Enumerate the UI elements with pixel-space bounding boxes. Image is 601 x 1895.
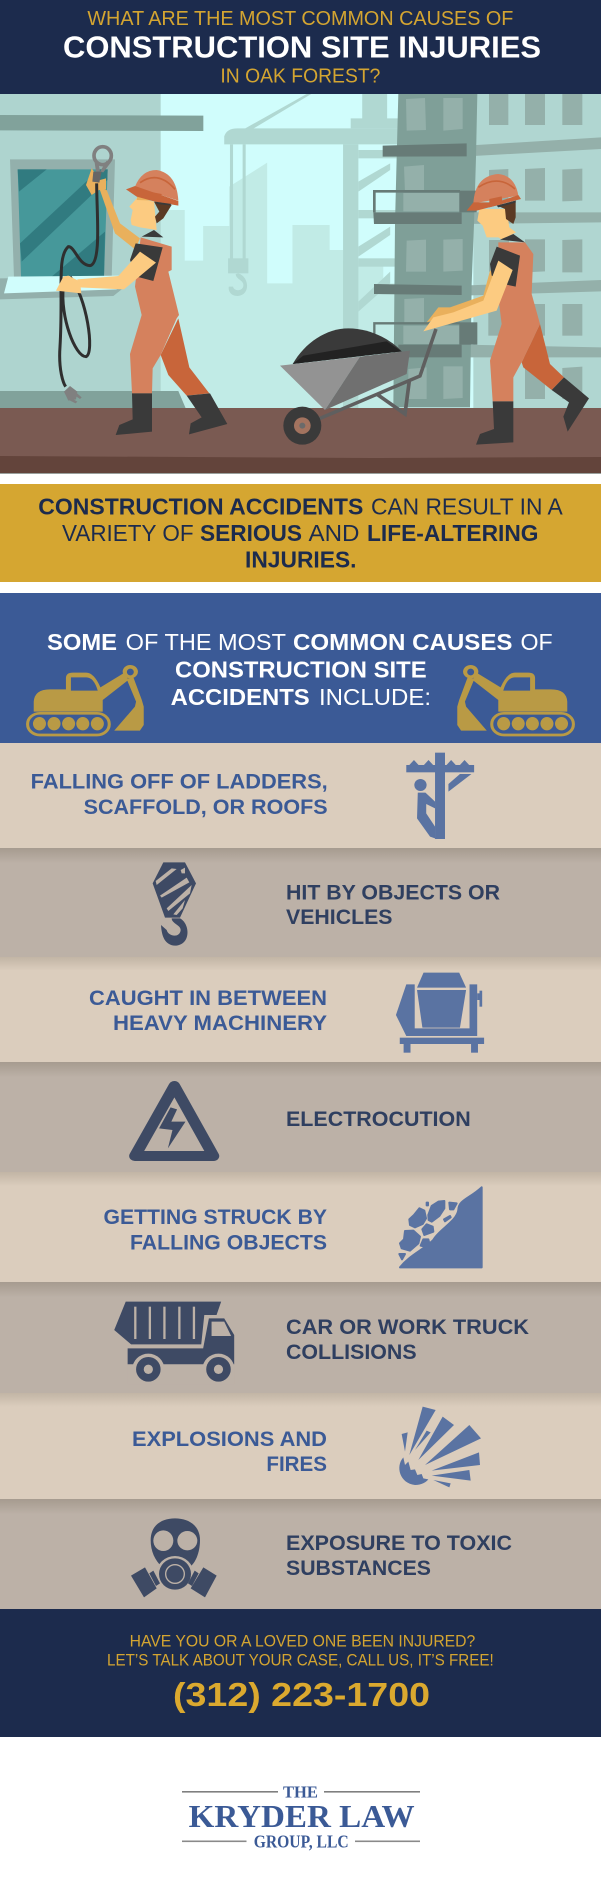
logo: The Kryder Law Group: GROUP, LLC bbox=[254, 1832, 349, 1852]
icon: excavator left bbox=[28, 665, 144, 735]
panel: explosions and fires: FIRES bbox=[266, 1452, 327, 1476]
panel: truck collisions: CAR OR WORK TRUCK bbox=[286, 1315, 529, 1339]
panel: falling objects: FALLING OBJECTS bbox=[130, 1230, 327, 1254]
panel: toxic substances: EXPOSURE TO TOXIC bbox=[286, 1531, 512, 1555]
title line two: CONSTRUCTION SITE INJURIES bbox=[63, 31, 541, 65]
panel: hit by objects bbox=[0, 848, 601, 957]
callout: gold intro band: CAN RESULT IN A bbox=[371, 494, 563, 520]
heading text: OF bbox=[520, 629, 553, 655]
heading text: SOME bbox=[47, 629, 117, 655]
callout: gold intro band: SERIOUS bbox=[200, 520, 302, 546]
icon: cement mixer bbox=[396, 973, 484, 1053]
heading text: CONSTRUCTION SITE bbox=[175, 657, 427, 683]
panel: falling objects bbox=[0, 1172, 601, 1282]
icon: dump truck bbox=[114, 1302, 235, 1385]
logo: The Kryder Law Group bbox=[182, 1783, 420, 1852]
footer call to action bbox=[0, 1609, 601, 1737]
footer call to action: HAVE YOU OR A LOVED ONE BEEN INJURED? bbox=[130, 1632, 475, 1651]
heading text: INCLUDE: bbox=[319, 684, 431, 710]
panel: electrocution: ELECTROCUTION bbox=[286, 1107, 471, 1131]
skyline and crane bbox=[160, 94, 399, 411]
heading text bbox=[47, 629, 553, 710]
icon: worker climbing utility pole bbox=[406, 753, 474, 839]
icon: excavator right bbox=[457, 665, 573, 735]
ground bbox=[0, 408, 601, 474]
callout: gold intro band: CONSTRUCTION ACCIDENTS bbox=[38, 494, 363, 520]
callout: gold intro band: VARIETY OF bbox=[62, 520, 194, 546]
panel: explosions and fires bbox=[0, 1393, 601, 1499]
panel: falling off ladders: SCAFFOLD, OR ROOFS bbox=[84, 795, 328, 819]
panel: falling off ladders bbox=[0, 743, 601, 848]
phone number: (312) 223-1700 bbox=[173, 1676, 430, 1713]
right worker with wheelbarrow bbox=[423, 174, 589, 445]
icon: rockslide bbox=[399, 1187, 482, 1267]
left building bbox=[0, 94, 203, 409]
title line three: IN OAK FOREST? bbox=[220, 66, 380, 88]
heading text: OF THE MOST bbox=[126, 629, 286, 655]
panel: hit by objects: VEHICLES bbox=[286, 905, 392, 929]
icon: gas mask bbox=[131, 1518, 217, 1597]
callout: gold intro band: INJURIES. bbox=[245, 547, 356, 573]
header banner bbox=[0, 0, 601, 94]
panel: falling objects: GETTING STRUCK BY bbox=[104, 1205, 327, 1229]
logo: The Kryder Law Group: THE bbox=[283, 1783, 318, 1802]
footer call to action: LET’S TALK ABOUT YOUR CASE, CALL US, IT’S FREE! bbox=[107, 1651, 494, 1670]
right building and tower bbox=[373, 94, 601, 409]
panel: explosions and fires: EXPLOSIONS AND bbox=[132, 1427, 327, 1451]
panel: caught in machinery bbox=[0, 957, 601, 1062]
panel: blue subheading bbox=[0, 593, 601, 743]
panel: electrocution bbox=[0, 1062, 601, 1172]
heading text: ACCIDENTS bbox=[171, 684, 310, 710]
logo: The Kryder Law Group: KRYDER LAW bbox=[189, 1798, 415, 1834]
panel: falling off ladders: FALLING OFF OF LADDERS, bbox=[31, 769, 328, 793]
callout: gold intro band: LIFE-ALTERING bbox=[367, 520, 538, 546]
heading text: COMMON CAUSES bbox=[293, 629, 512, 655]
icon: explosion burst bbox=[399, 1407, 481, 1487]
callout: gold intro band: AND bbox=[308, 520, 360, 546]
panel: caught in machinery: CAUGHT IN BETWEEN bbox=[89, 986, 327, 1010]
panel: hit by objects: HIT BY OBJECTS OR bbox=[286, 880, 500, 904]
callout: gold intro band bbox=[0, 484, 601, 582]
icon: crane hook bbox=[153, 862, 196, 946]
illustration: construction workers on site bbox=[0, 94, 601, 474]
panel: truck collisions bbox=[0, 1282, 601, 1393]
icon: high voltage warning bbox=[135, 1086, 213, 1156]
wheelbarrow bbox=[280, 328, 436, 445]
title line one: WHAT ARE THE MOST COMMON CAUSES OF bbox=[87, 8, 513, 30]
left worker with cable bbox=[56, 147, 227, 435]
panel: truck collisions: COLLISIONS bbox=[286, 1340, 417, 1364]
panel: toxic substances bbox=[0, 1499, 601, 1609]
panel: toxic substances: SUBSTANCES bbox=[286, 1556, 431, 1580]
panel: caught in machinery: HEAVY MACHINERY bbox=[113, 1011, 327, 1035]
